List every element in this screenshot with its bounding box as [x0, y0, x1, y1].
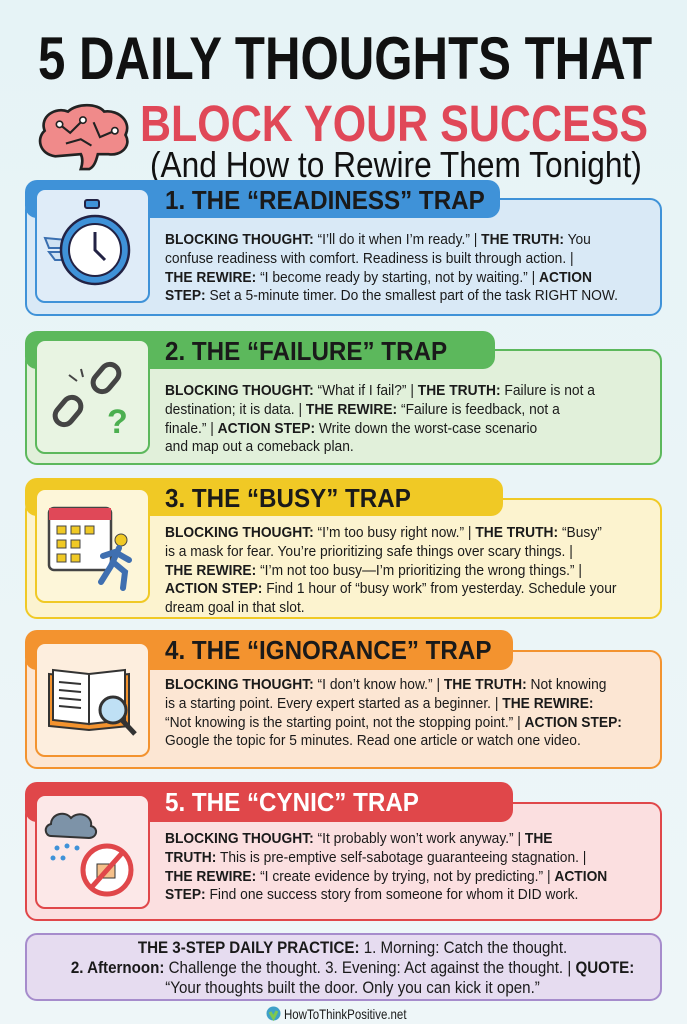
panel: busy: 3. THE “BUSY” TRAP: [165, 483, 411, 513]
panel: readiness: [25, 180, 662, 316]
text: cynic: [165, 830, 607, 903]
icon: broken chain: ?: [107, 403, 128, 441]
text: busy: THE REWIRE: “I’m not too busy—I’m prioritizing the wrong things.” |: [165, 562, 582, 579]
text: practice: [71, 938, 635, 997]
text: readiness: confuse readiness with comfort. Readiness is built through action. |: [165, 250, 574, 267]
icon: rain cloud no thumbs: [35, 794, 150, 909]
panel: readiness: 1. THE “READINESS” TRAP: [165, 185, 485, 215]
text: ignorance: Google the topic for 5 minutes. Read one article or watch one video.: [165, 732, 581, 749]
text: ignorance: [165, 676, 622, 749]
title line 2: BLOCK YOUR SUCCESS: [140, 95, 648, 152]
title line 1: 5 DAILY THOUGHTS THAT: [38, 25, 652, 92]
text: failure: finale.” | ACTION STEP: Write down the worst-case scenario: [165, 420, 537, 437]
text: failure: and map out a comeback plan.: [165, 438, 354, 455]
text: busy: is a mask for fear. You’re prioritizing safe things over scary things. |: [165, 543, 573, 560]
text: practice: “Your thoughts built the door. Only you can kick it open.”: [166, 978, 540, 997]
text: busy: [165, 524, 616, 616]
subtitle: (And How to Rewire Them Tonight): [150, 144, 642, 185]
icon: broken chain: [35, 339, 150, 454]
text: readiness: [165, 231, 618, 304]
title: [38, 25, 652, 185]
icon: calendar runner: [35, 488, 150, 603]
text: failure: BLOCKING THOUGHT: “What if I fail?” | THE TRUTH: Failure is not a: [165, 382, 595, 399]
icon: logo: [266, 1006, 280, 1021]
panel: cynic: 5. THE “CYNIC” TRAP: [165, 787, 419, 817]
text: failure: destination; it is data. | THE REWIRE: “Failure is feedback, not a: [165, 401, 560, 418]
text: practice: 2. Afternoon: Challenge the thought. 3. Evening: Act against the thought. | QUOTE:: [71, 958, 635, 977]
icon: stopwatch: [35, 188, 150, 303]
text: busy: dream goal in that slot.: [165, 599, 305, 616]
text: busy: BLOCKING THOUGHT: “I’m too busy right now.” | THE TRUTH: “Busy”: [165, 524, 602, 541]
text: cynic: THE REWIRE: “I create evidence by trying, not by predicting.” | ACTION: [165, 868, 607, 885]
text: readiness: STEP: Set a 5-minute timer. Do the smallest part of the task RIGHT NOW.: [165, 287, 618, 304]
footer: HowToThinkPositive.net: [284, 1006, 407, 1022]
panel: failure: [25, 331, 662, 465]
text: cynic: TRUTH: This is pre-emptive self-sabotage guaranteeing stagnation. |: [165, 849, 586, 866]
icon: book magnifier: [35, 642, 150, 757]
text: cynic: STEP: Find one success story from someone for whom it DID work.: [165, 886, 578, 903]
text: readiness: BLOCKING THOUGHT: “I’ll do it when I’m ready.” | THE TRUTH: You: [165, 231, 591, 248]
panel: cynic: [25, 782, 662, 921]
text: ignorance: “Not knowing is the starting point, not the stopping point.” | ACTION STEP:: [165, 714, 622, 731]
text: ignorance: BLOCKING THOUGHT: “I don’t know how.” | THE TRUTH: Not knowing: [165, 676, 606, 693]
text: cynic: BLOCKING THOUGHT: “It probably won’t work anyway.” | THE: [165, 830, 553, 847]
text: readiness: THE REWIRE: “I become ready by starting, not by waiting.” | ACTION: [165, 269, 592, 286]
icon: brain: [38, 104, 129, 170]
text: failure: [165, 382, 595, 455]
text: practice: THE 3-STEP DAILY PRACTICE: 1. Morning: Catch the thought.: [138, 938, 568, 957]
panel: ignorance: [25, 630, 662, 769]
text: ignorance: is a starting point. Every expert started as a beginner. | THE REWIRE:: [165, 695, 594, 712]
text: busy: ACTION STEP: Find 1 hour of “busy work” from yesterday. Schedule your: [165, 580, 616, 597]
panel: daily practice: [25, 933, 662, 1001]
panel: busy: [25, 478, 662, 619]
panel: failure: 2. THE “FAILURE” TRAP: [165, 336, 447, 366]
panel: ignorance: 4. THE “IGNORANCE” TRAP: [165, 635, 491, 665]
